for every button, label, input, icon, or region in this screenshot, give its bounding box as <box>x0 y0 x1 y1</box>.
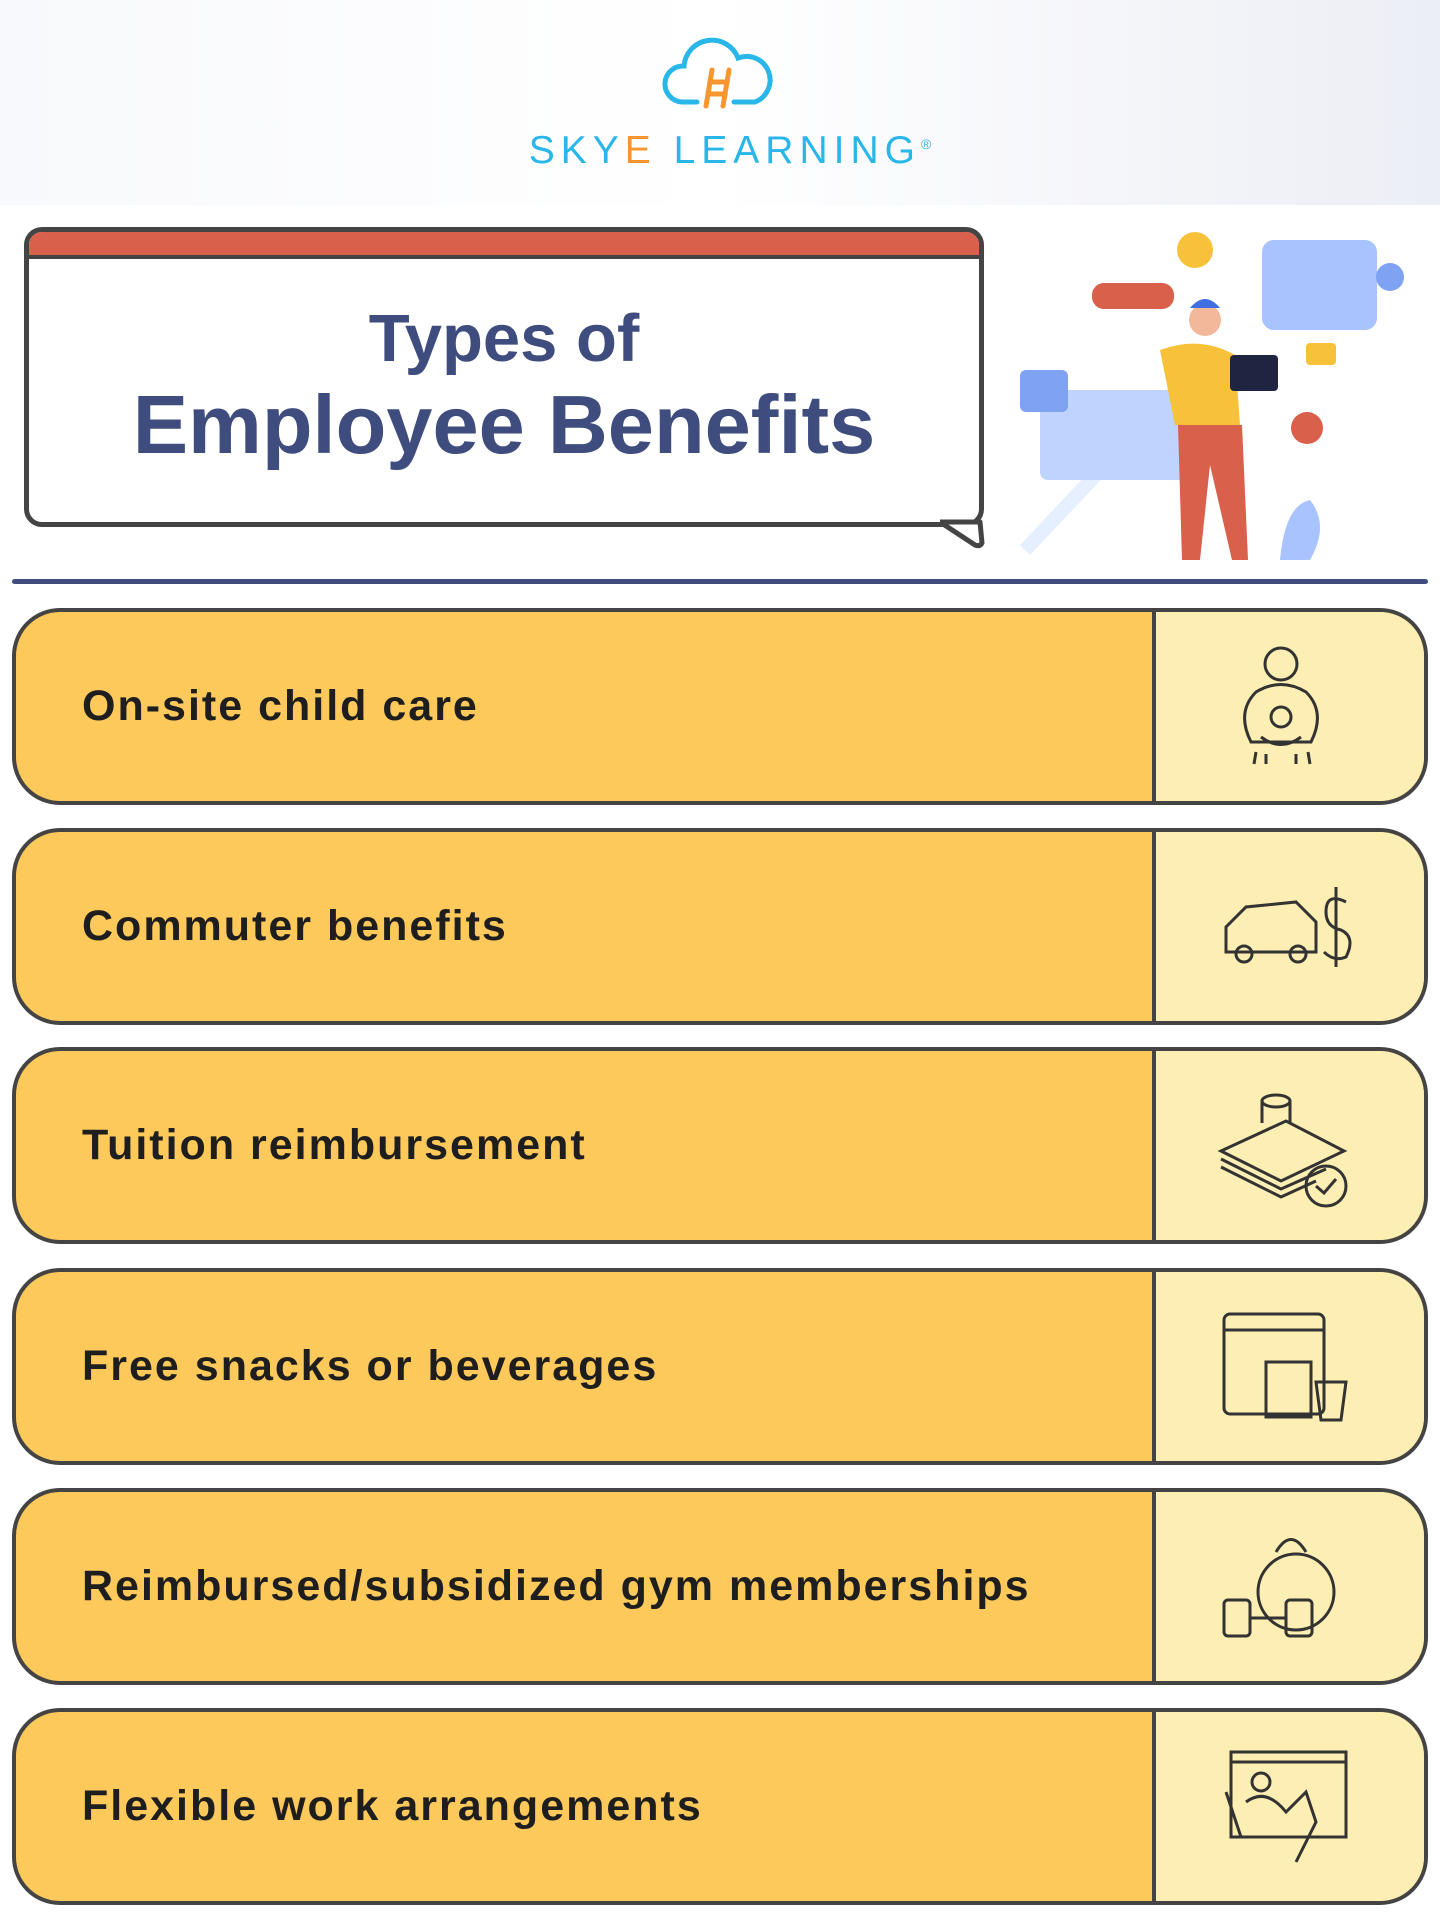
row: commuter benefits <box>12 828 1428 1025</box>
title box <box>24 227 984 527</box>
row: tuition reimbursement: Tuition reimbursement <box>82 1121 587 1169</box>
row: on-site child care: On-site child care <box>82 682 479 730</box>
row: flexible work <box>12 1708 1428 1905</box>
title text <box>133 301 875 471</box>
title text: Types of <box>369 301 639 376</box>
row: free snacks: Free snacks or beverages <box>82 1342 658 1390</box>
row: tuition reimbursement <box>12 1047 1428 1244</box>
row: on-site child care <box>12 608 1428 805</box>
row: free snacks <box>12 1268 1428 1465</box>
logo icon: cloud with ladder <box>662 38 773 108</box>
divider line <box>12 579 1428 584</box>
title text: Employee Benefits <box>133 378 875 471</box>
row: gym memberships: Reimbursed/subsidized gym memberships <box>82 1562 1031 1610</box>
logo text: SKYE LEARNING® <box>529 129 931 172</box>
row: commuter benefits: Commuter benefits <box>82 902 508 950</box>
header band <box>0 0 1440 205</box>
speech tail <box>940 520 984 548</box>
illustration: person with laptop <box>1020 232 1404 560</box>
row: gym memberships <box>12 1488 1428 1685</box>
row: flexible work: Flexible work arrangements <box>82 1782 703 1830</box>
